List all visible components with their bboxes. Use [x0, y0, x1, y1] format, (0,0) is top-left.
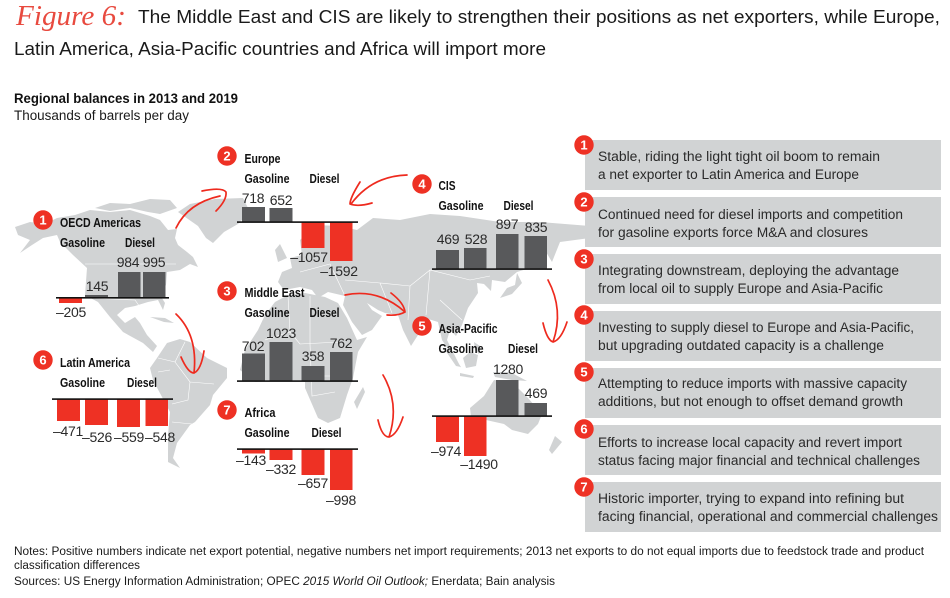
gasoline label: Gasoline — [438, 341, 484, 356]
bars — [242, 342, 352, 381]
values — [431, 361, 548, 472]
Greenland — [178, 198, 250, 243]
United Kingdom — [275, 244, 287, 262]
values: 835 — [525, 219, 548, 235]
South America — [150, 339, 227, 468]
arrow: OECD Americas to Europe — [176, 189, 226, 228]
values: 995 — [143, 254, 166, 270]
badge 1 — [33, 210, 53, 230]
values: –998 — [326, 492, 356, 508]
box — [585, 197, 941, 247]
axis — [237, 221, 358, 223]
region name: Middle East — [244, 285, 305, 300]
panel: Africa — [217, 400, 358, 508]
region name: OECD Americas — [60, 215, 141, 230]
Cuba — [150, 317, 174, 323]
badge number 4: 4 — [580, 308, 588, 322]
text line: Efforts to increase local capacity and revert import — [598, 435, 902, 450]
values: 718 — [242, 190, 265, 206]
country borders — [85, 264, 490, 424]
bars — [242, 207, 352, 261]
figure label: Figure 6: — [15, 1, 126, 32]
Australia — [470, 380, 542, 434]
badge 3 — [574, 249, 594, 269]
text line: for gasoline exports force M&A and closures — [598, 225, 868, 240]
text line: Integrating downstream, deploying the advantage — [598, 263, 899, 278]
values: 762 — [330, 335, 353, 351]
axis — [432, 268, 552, 270]
badge 4 — [412, 174, 432, 194]
badge number 7: 7 — [223, 402, 231, 418]
notes line one: Notes: Positive numbers indicate net export potential, negative numbers net import requirements; 2013 net exports to do not equal imports due to feedstock trade and product — [14, 546, 925, 558]
badge number 5: 5 — [418, 318, 426, 334]
values: –1592 — [320, 263, 358, 279]
New Zealand — [549, 436, 562, 454]
values: 358 — [302, 348, 325, 364]
title — [14, 1, 940, 59]
gasoline label: Gasoline — [60, 375, 105, 390]
diesel label: Diesel — [312, 425, 342, 440]
arrow: Middle East to Asia-Pacific — [345, 293, 405, 315]
text line: facing financial, operational and commercial challenges — [598, 509, 938, 524]
badge 5 — [574, 362, 594, 382]
diesel label: Diesel — [125, 235, 155, 250]
badge 5 — [412, 316, 432, 336]
values — [236, 452, 356, 508]
gasoline label: Gasoline — [244, 305, 290, 320]
Southeast Asia islands — [443, 342, 527, 381]
bars — [59, 272, 166, 303]
footnotes — [14, 546, 925, 588]
arrow: CIS to Asia-Pacific — [543, 280, 567, 342]
axis — [52, 398, 173, 400]
badge number 3: 3 — [580, 252, 588, 266]
panel: Middle East — [217, 281, 358, 382]
gasoline label: Gasoline — [60, 235, 105, 250]
badge 2 — [217, 146, 237, 166]
text line: but upgrading outdated capacity is a challenge — [598, 338, 884, 353]
values — [53, 423, 175, 445]
sources line: Sources: US Energy Information Administration; OPEC 2015 World Oil Outlook; Enerdata; Bain analysis — [14, 576, 555, 588]
text line: Stable, riding the light tight oil boom to remain — [598, 149, 880, 164]
values — [437, 216, 548, 247]
text line: Investing to supply diesel to Europe and Asia-Pacific, — [598, 320, 914, 335]
bars — [436, 234, 547, 269]
region name: Europe — [244, 151, 280, 166]
region name: Asia-Pacific — [438, 321, 498, 336]
values: 528 — [465, 231, 488, 247]
values: 897 — [496, 216, 519, 232]
box — [585, 482, 941, 532]
axis — [237, 380, 358, 382]
axis — [432, 415, 552, 417]
badge number 4: 4 — [418, 176, 426, 192]
panel: Asia-Pacific — [412, 316, 552, 472]
values: –548 — [145, 429, 175, 445]
badge number 1: 1 — [39, 212, 47, 228]
arrow: Middle East to Africa — [378, 375, 403, 437]
badge number 6: 6 — [580, 422, 588, 436]
headline line one: The Middle East and CIS are likely to strengthen their positions as net exporters, while Europe, — [138, 6, 940, 27]
axis — [237, 448, 358, 450]
box — [585, 311, 941, 361]
text line: Continued need for diesel imports and competition — [598, 207, 903, 222]
diesel label: Diesel — [508, 341, 538, 356]
Eurasia — [278, 214, 590, 368]
values: –143 — [236, 452, 266, 468]
values: –205 — [56, 304, 86, 320]
Madagascar — [354, 387, 365, 409]
text line: a net exporter to Latin America and Europe — [598, 167, 859, 182]
text line: from local oil to supply Europe and Asia-Pacific — [598, 281, 883, 296]
values: –1057 — [290, 249, 328, 265]
values: –657 — [298, 475, 328, 491]
headline line two: Latin America, Asia-Pacific countries and Africa will import more — [14, 38, 546, 59]
text line: status facing major financial and technical challenges — [598, 453, 920, 468]
axis — [56, 297, 169, 299]
chart heading — [14, 91, 238, 123]
text line: Attempting to reduce imports with massive capacity — [598, 376, 907, 391]
panel: CIS — [412, 174, 552, 270]
box — [585, 140, 941, 190]
values: –559 — [114, 429, 144, 445]
region name: Latin America — [60, 355, 131, 370]
box — [585, 425, 941, 475]
notes line two: classification differences — [14, 560, 140, 572]
arrow: OECD Americas to Latin America — [176, 314, 204, 373]
badge number 6: 6 — [39, 352, 47, 368]
values: 1023 — [266, 325, 296, 341]
bars — [436, 380, 547, 456]
values: 469 — [525, 385, 548, 401]
arrow: CIS to Europe — [350, 175, 407, 205]
text line: additions, but not enough to offset demand growth — [598, 394, 903, 409]
values — [242, 325, 353, 364]
panel: commentary 1 — [574, 135, 941, 190]
North and Central America — [15, 210, 198, 352]
panel: Latin America — [33, 350, 175, 445]
values: 145 — [86, 278, 109, 294]
gasoline label: Gasoline — [244, 425, 290, 440]
badge 6 — [574, 419, 594, 439]
text line: Historic importer, trying to expand into refining but — [598, 491, 904, 506]
badge number 5: 5 — [580, 364, 588, 380]
panel: commentary 6 — [574, 419, 941, 475]
Africa — [240, 293, 367, 423]
panel: commentary 4 — [574, 305, 941, 361]
region name: CIS — [438, 178, 456, 193]
badge 4 — [574, 305, 594, 325]
panel: Europe — [217, 146, 358, 279]
panel: OECD Americas — [33, 210, 169, 320]
values: –1490 — [460, 456, 498, 472]
chart units: Thousands of barrels per day — [14, 108, 189, 123]
panel: commentary 5 — [574, 362, 941, 418]
chart title: Regional balances in 2013 and 2019 — [14, 91, 238, 106]
diesel label: Diesel — [310, 305, 340, 320]
badge 7 — [217, 400, 237, 420]
gasoline label: Gasoline — [438, 198, 484, 213]
values: –526 — [82, 429, 112, 445]
badge number 2: 2 — [223, 148, 231, 164]
badge number 3: 3 — [223, 284, 231, 298]
badge 7 — [574, 477, 594, 497]
values: 469 — [437, 231, 460, 247]
values: 702 — [242, 338, 265, 354]
badge 6 — [33, 350, 53, 370]
box — [585, 368, 941, 418]
values — [56, 254, 166, 320]
values: –974 — [431, 443, 461, 459]
badge 1 — [574, 135, 594, 155]
diesel label: Diesel — [310, 171, 340, 186]
Canadian Arctic islands — [95, 199, 177, 214]
diesel label: Diesel — [504, 198, 534, 213]
values: 1280 — [493, 361, 523, 377]
panel: commentary 2 — [574, 192, 941, 247]
panel: commentary 7 — [574, 477, 941, 532]
gasoline label: Gasoline — [244, 171, 290, 186]
values: –332 — [266, 461, 296, 477]
badge number 7: 7 — [580, 480, 588, 494]
bars — [242, 449, 352, 490]
badge 3 — [217, 281, 237, 301]
diesel label: Diesel — [127, 375, 157, 390]
Japan — [500, 273, 522, 298]
panel: commentary 3 — [574, 249, 941, 304]
box — [585, 254, 941, 304]
values: 652 — [270, 192, 293, 208]
badge number 2: 2 — [580, 194, 588, 210]
badge number 1: 1 — [580, 138, 588, 152]
values: 984 — [117, 254, 140, 270]
bars — [57, 399, 168, 427]
values — [242, 190, 358, 279]
badge 2 — [574, 192, 594, 212]
values: –471 — [53, 423, 83, 439]
region name: Africa — [244, 405, 276, 420]
world map — [15, 198, 590, 468]
